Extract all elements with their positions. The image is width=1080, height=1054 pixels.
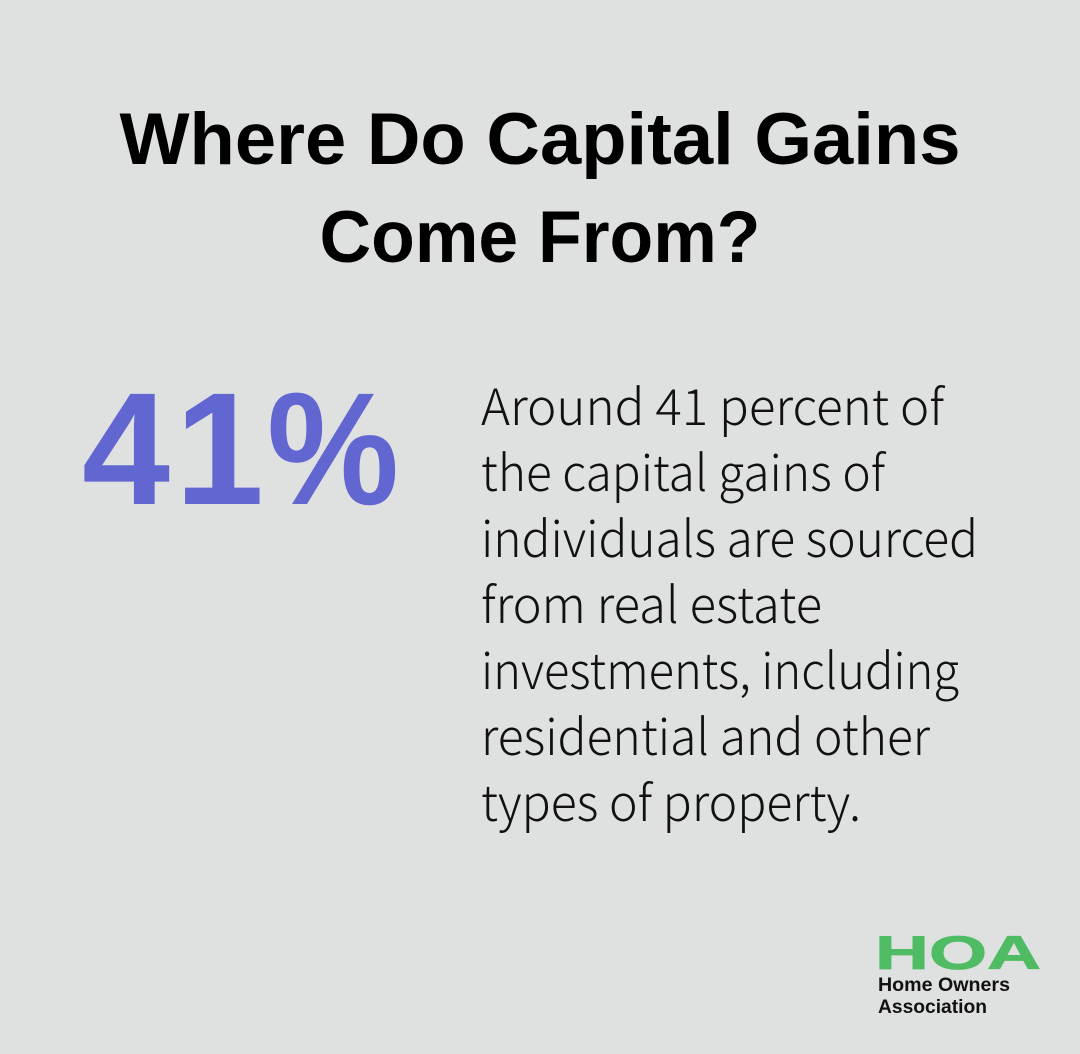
logo: Home Owners Association: Home Owners	[878, 975, 1010, 996]
logo: Home Owners Association	[875, 926, 1041, 1018]
description text: residential and other	[481, 698, 931, 770]
description text: types of property.	[481, 764, 861, 836]
big statistic: 41%	[82, 359, 399, 538]
description text: investments, including	[481, 632, 959, 704]
description text: individuals are sourced	[481, 500, 978, 572]
description text: the capital gains of	[481, 434, 887, 506]
big statistic: 41%: 4	[82, 359, 170, 538]
description text: Around 41 percent of	[481, 368, 946, 440]
title: Come From?	[320, 197, 760, 278]
logo: Home Owners Association: Association	[878, 997, 987, 1018]
description text	[481, 368, 978, 836]
big statistic: 41%: %	[267, 359, 399, 538]
description text: from real estate	[481, 566, 822, 638]
title: Where Do Capital Gains	[120, 99, 960, 180]
title	[120, 99, 960, 278]
big statistic: 41%: 1	[175, 359, 264, 538]
logo: Home Owners Association: HOA	[875, 926, 1041, 979]
